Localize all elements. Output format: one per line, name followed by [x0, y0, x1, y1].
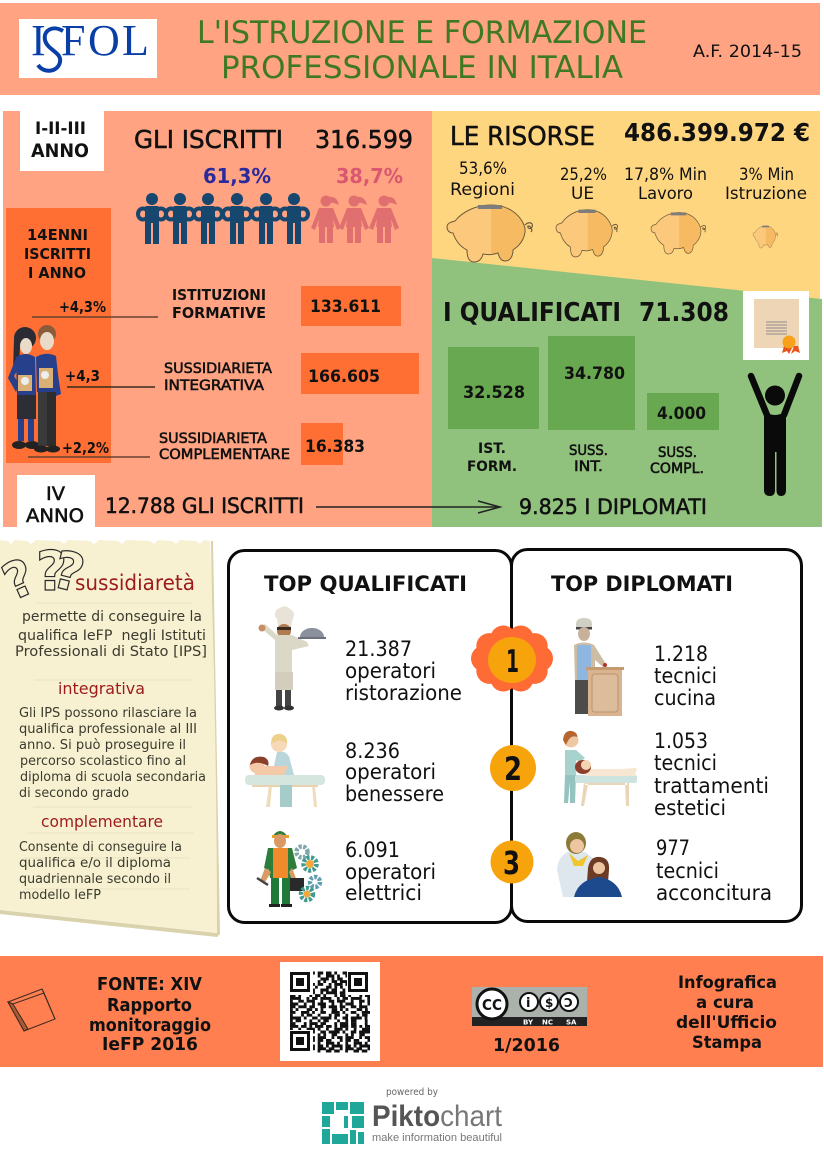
label: COMPL. — [650, 461, 704, 477]
logo mark — [322, 1102, 364, 1144]
icon: question marks: ? — [46, 540, 90, 605]
icon: massage — [245, 734, 325, 807]
bar: 166.605 — [301, 353, 419, 394]
text: 6.091 operatori elettrici — [345, 838, 436, 905]
icon: piggy bank tiny — [753, 226, 778, 248]
label — [569, 443, 608, 475]
bar: suss. int. 34.780 — [548, 336, 635, 475]
growth: istituzioni formative — [32, 298, 158, 317]
I-II-III anno label — [20, 111, 104, 171]
bar: 133.611 — [301, 286, 401, 326]
heading: le risorse: 486.399.972 € — [624, 118, 810, 147]
text: integrativa: percorso scolastico fino al — [20, 754, 186, 769]
icon: question marks — [0, 540, 90, 612]
label — [650, 445, 704, 477]
text: fonte: FONTE: XIV — [97, 974, 202, 995]
14enni heading: ISCRITTI — [24, 245, 91, 263]
resource: min istruzione: 3% Min — [739, 165, 794, 185]
text: 21.387 operatori ristorazione: operatori — [345, 659, 436, 683]
wordmark: Piktochart — [372, 1100, 503, 1133]
label: sussidiarieta integrativa: SUSSIDIARIETA — [164, 361, 272, 377]
label: INT. — [574, 459, 603, 475]
rank badge 1 — [471, 626, 553, 692]
resource: min istruzione: Istruzione — [725, 184, 807, 204]
heading: le risorse: LE RISORSE — [450, 122, 595, 152]
icon: question marks: ? — [36, 540, 67, 603]
growth: istituzioni formative: +4,3% — [59, 298, 106, 316]
text: 8.236 operatori benessere: 8.236 — [345, 739, 400, 763]
label: istituzioni formative: ISTITUZIONI — [172, 286, 266, 304]
gender percentages: 61,3% — [203, 164, 271, 188]
I-II-III anno label: ANNO — [31, 140, 89, 162]
heading: top diplomati: TOP DIPLOMATI — [551, 572, 733, 596]
heading: gli iscritti: GLI ISCRITTI — [134, 125, 283, 154]
text: sussidiarietà: Professionali di Stato [IPS] — [15, 644, 207, 660]
footer band — [0, 956, 823, 1067]
growth: sussidiarieta complementare: +2,2% — [62, 439, 109, 457]
icons: male students — [138, 193, 308, 244]
text: 6.091 operatori elettrici: elettrici — [345, 881, 422, 905]
rank badge 1: 1 — [506, 644, 519, 680]
header band — [0, 3, 820, 95]
panel: le risorse background — [432, 111, 820, 301]
text: credits: a cura — [696, 993, 754, 1013]
text: 977 tecnici acconcitura: acconcitura — [656, 881, 772, 905]
bar: suss. compl. 4.000 — [647, 393, 719, 477]
icon: person raising arms — [751, 376, 799, 496]
rank badge 3 — [490, 840, 534, 884]
panel: i qualificati background — [432, 258, 822, 527]
rank badge 2 — [490, 745, 536, 791]
label: SUSS. — [569, 443, 608, 459]
academic year: A.F. 2014-15 — [693, 42, 802, 62]
heading: le risorse — [450, 118, 810, 152]
text: sussidiarietà: permette di conseguire la — [22, 609, 202, 625]
text: integrativa: Gli IPS possono rilasciare la — [19, 706, 197, 721]
text: complementare — [19, 840, 182, 903]
heading: complementare: complementare — [41, 812, 163, 831]
text: complementare: Consente di conseguire la — [19, 840, 182, 855]
icon: piggy bank small — [651, 212, 706, 254]
gender percentages — [203, 164, 403, 188]
bar: suss. compl. 4.000: 4.000 — [657, 404, 706, 424]
arrow: iscritti to diplomati — [316, 501, 500, 513]
text: sussidiarietà — [15, 609, 207, 660]
text: credits: Stampa — [692, 1033, 762, 1053]
text: 8.236 operatori benessere: benessere — [345, 782, 444, 806]
text: 21.387 operatori ristorazione: ristorazione — [345, 681, 462, 705]
resource: min lavoro: Lavoro — [638, 184, 693, 204]
panel: iscritti background — [3, 111, 432, 527]
resource: regioni — [447, 159, 532, 262]
text: fonte: Rapporto — [107, 995, 192, 1016]
icon: book — [8, 989, 55, 1031]
text: 8.236 operatori benessere — [345, 739, 444, 806]
text: integrativa — [19, 706, 206, 801]
panel: 14enni — [6, 208, 111, 463]
14enni heading: 14ENNI — [27, 226, 88, 244]
label: sussidiarieta complementare — [159, 431, 290, 463]
icon: creative commons badge: NC — [542, 1018, 553, 1026]
heading: i qualificati — [443, 298, 729, 328]
icon: creative commons badge — [472, 987, 587, 1026]
rank badge 3: 3 — [503, 844, 520, 882]
IV anno label: IV — [46, 483, 65, 505]
bar: ist. form. 32.528: 32.528 — [463, 383, 525, 403]
label: SUSS. — [658, 445, 697, 461]
icons: female students — [311, 196, 399, 243]
label: FORM. — [467, 459, 517, 475]
text: 6.091 operatori elettrici: 6.091 — [345, 838, 400, 862]
icon: hairdresser — [557, 832, 622, 897]
title: L'ISTRUZIONE E FORMAZIONE — [197, 15, 647, 51]
text: 21.387 operatori ristorazione — [345, 637, 462, 705]
label: istituzioni formative: FORMATIVE — [172, 304, 266, 322]
text: credits: Infografica — [678, 973, 777, 993]
heading: i qualificati: 71.308 — [639, 298, 729, 328]
icon: piggy bank large — [447, 205, 532, 262]
label: IST. — [478, 441, 506, 457]
logo: ISFOL — [19, 16, 157, 78]
text: iscritti IV anno: 12.788 GLI ISCRITTI — [105, 494, 304, 518]
text: integrativa: di secondo grado — [19, 786, 129, 801]
gender percentages: 38,7% — [336, 164, 403, 188]
logo: ISFOL: I — [31, 16, 46, 65]
text: 8.236 operatori benessere: operatori — [345, 760, 436, 784]
text: diplomati: 9.825 I DIPLOMATI — [519, 495, 707, 519]
text: 977 tecnici acconcitura: 977 — [656, 836, 690, 860]
resource: UE: 25,2% — [560, 165, 607, 185]
text: 1.053 tecnici trattamenti estetici: tecnici — [654, 751, 717, 775]
heading: gli iscritti — [134, 125, 413, 154]
text: fonte: monitoraggio — [89, 1015, 211, 1036]
label: sussidiarieta integrativa: INTEGRATIVA — [164, 378, 264, 394]
title: PROFESSIONALE IN ITALIA — [221, 50, 623, 86]
text: 1.053 tecnici trattamenti estetici: estetici — [654, 796, 726, 820]
label: sussidiarieta integrativa — [164, 361, 272, 394]
icon: creative commons badge: i — [526, 996, 530, 1011]
text: 21.387 operatori ristorazione: 21.387 — [345, 637, 412, 661]
text: fonte: IeFP 2016 — [102, 1034, 198, 1055]
resource: min lavoro: 17,8% Min — [624, 165, 707, 185]
resource: regioni: Regioni — [450, 180, 515, 200]
text: complementare: quadriennale secondo il — [19, 872, 171, 887]
icon: creative commons badge: BY — [523, 1018, 534, 1026]
text: fonte — [89, 974, 211, 1055]
text: 977 tecnici acconcitura: tecnici — [656, 859, 719, 883]
text: complementare: qualifica e/o il diploma — [19, 856, 171, 871]
bar: suss. int. 34.780: 34.780 — [564, 364, 625, 384]
I-II-III anno label: I-II-III — [35, 119, 86, 139]
panel: top qualificati — [228, 550, 512, 922]
text: integrativa: anno. Si può proseguire il — [19, 738, 186, 753]
14enni heading: I ANNO — [28, 264, 86, 282]
logo: ISFOL: FOL — [61, 16, 149, 65]
text: integrativa: qualifica professionale al III — [19, 722, 197, 737]
resource: UE — [556, 165, 618, 257]
label — [467, 441, 517, 475]
icon: certificate — [743, 291, 809, 360]
text: 977 tecnici acconcitura — [656, 836, 772, 905]
text: 1.218 tecnici cucina: cucina — [654, 686, 716, 710]
bar: 16.383 — [301, 423, 365, 465]
QR code — [280, 962, 380, 1061]
title — [197, 15, 647, 86]
heading: sussidiarietà: sussidiaretà — [75, 571, 195, 595]
text: 1.218 tecnici cucina: 1.218 — [654, 642, 708, 666]
resource: regioni: 53,6% — [459, 159, 507, 179]
resource: min istruzione — [725, 165, 807, 248]
bar: 133.611: 133.611 — [310, 297, 381, 317]
text: credits: dell'Ufficio — [676, 1013, 777, 1033]
icon: chef — [258, 606, 326, 710]
piktochart branding — [322, 1087, 503, 1144]
IV anno label: ANNO — [26, 505, 84, 527]
growth: sussidiarieta integrativa: +4,3 — [65, 367, 100, 385]
icon: beauty treatment — [563, 731, 637, 806]
text: 6.091 operatori elettrici: operatori — [345, 860, 436, 884]
heading: integrativa: integrativa — [58, 679, 145, 698]
growth: sussidiarieta integrativa — [65, 367, 155, 387]
tagline: make information beautiful — [372, 1132, 502, 1144]
icon: creative commons badge: CC — [482, 996, 502, 1014]
resource: UE: UE — [571, 184, 594, 204]
bar: 16.383: 16.383 — [305, 437, 365, 457]
label: sussidiarieta complementare: COMPLEMENTARE — [159, 447, 290, 463]
bar: 166.605: 166.605 — [308, 367, 380, 387]
heading: top qualificati: TOP QUALIFICATI — [264, 572, 467, 596]
text: 1.218 tecnici cucina — [654, 642, 717, 710]
icon: cook at counter — [574, 618, 624, 716]
heading: gli iscritti: 316.599 — [315, 125, 413, 154]
icon: electrician — [257, 831, 320, 907]
rank badge 2: 2 — [504, 750, 522, 788]
text: 1.053 tecnici trattamenti estetici: trattamenti — [654, 774, 769, 798]
illustration: two students — [8, 325, 61, 452]
icon: piggy bank medium — [556, 210, 618, 257]
label: sussidiarieta complementare: SUSSIDIARIETA — [159, 431, 267, 447]
text: 1.218 tecnici cucina: tecnici — [654, 664, 717, 688]
panel: top diplomati — [512, 550, 802, 922]
resource: min lavoro — [624, 165, 707, 254]
piktochart branding: powered by — [386, 1087, 438, 1098]
bar: ist. form. 32.528 — [448, 347, 539, 475]
14enni heading — [24, 226, 91, 282]
text: credits — [676, 973, 777, 1053]
IV anno label — [17, 475, 95, 527]
text: 1.053 tecnici trattamenti estetici — [654, 729, 769, 820]
text: complementare: modello IeFP — [19, 888, 101, 903]
note panel: sussidiarietà — [0, 540, 220, 937]
icon: creative commons badge: $ — [545, 996, 553, 1010]
text: sussidiarietà: qualifica IeFP negli Istituti — [18, 628, 206, 644]
date: 1/2016 — [493, 1035, 560, 1056]
heading: i qualificati: I QUALIFICATI — [443, 298, 621, 328]
text: integrativa: diploma di scuola secondaria — [20, 770, 206, 785]
label: istituzioni formative — [172, 286, 266, 322]
icon: creative commons badge: Ↄ — [564, 996, 573, 1010]
text: 1.053 tecnici trattamenti estetici: 1.053 — [654, 729, 708, 753]
icon: creative commons badge: SA — [566, 1018, 577, 1026]
growth: sussidiarieta complementare — [28, 439, 150, 457]
